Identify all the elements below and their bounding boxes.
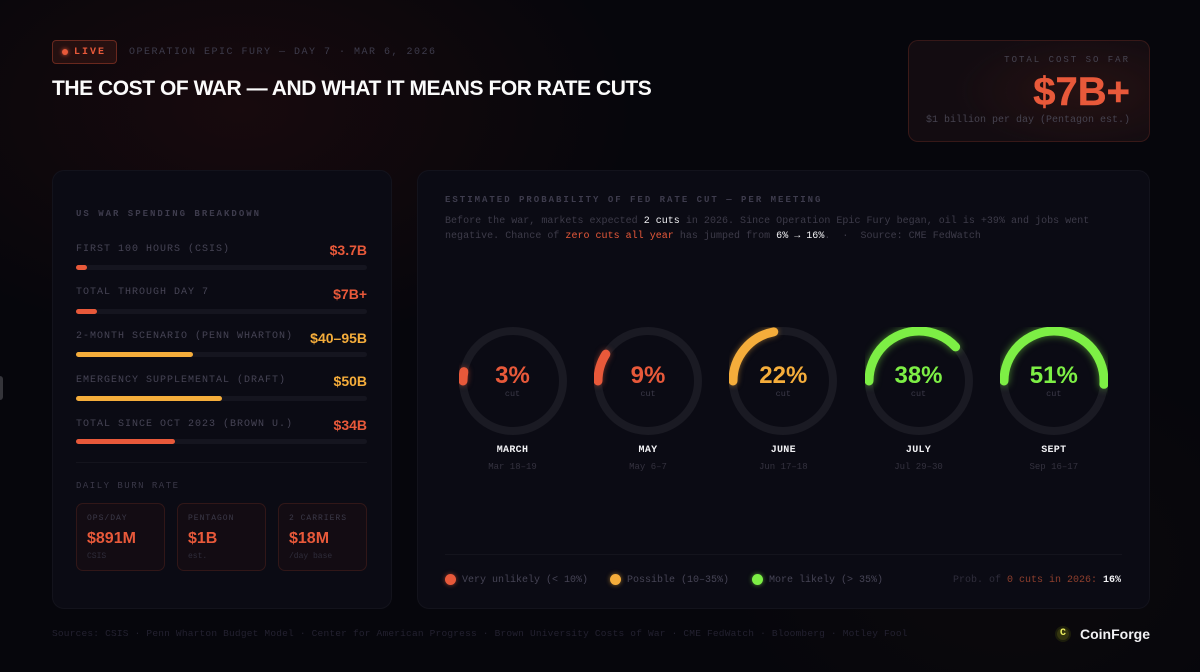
- spending heading: US WAR SPENDING BREAKDOWN: [76, 209, 261, 219]
- cost value: $7B+: [1033, 70, 1130, 114]
- gauge: march: 3%: [495, 362, 530, 389]
- gauge: sept: Sep 16–17: [1029, 462, 1078, 472]
- probability heading: ESTIMATED PROBABILITY OF FED RATE CUT — PER MEETING: [445, 195, 822, 205]
- burn rate heading: DAILY BURN RATE: [76, 481, 180, 491]
- title: THE COST OF WAR — AND WHAT IT MEANS FOR RATE CUTS: [52, 77, 651, 100]
- gauge: june: [729, 327, 837, 472]
- text: Possible (10–35%): [627, 575, 729, 586]
- text: Very unlikely (< 10%): [462, 575, 588, 586]
- card: ops per day: $891M: [87, 530, 136, 547]
- brand name: CoinForge: [1080, 626, 1150, 642]
- logo: coinforge: [1055, 626, 1150, 642]
- card: pentagon: PENTAGON: [188, 514, 234, 523]
- text: $7B+: [333, 286, 367, 302]
- spending row 2: [76, 286, 367, 314]
- gauge: july: JULY: [906, 445, 931, 456]
- gauge: june: cut: [776, 389, 791, 399]
- total cost box: [908, 40, 1150, 142]
- probability description: [445, 216, 1089, 242]
- operation label: OPERATION EPIC FURY — DAY 7 · MAR 6, 2026: [129, 47, 437, 58]
- gauge: march: MARCH: [497, 445, 528, 456]
- gauge: july: [865, 327, 973, 472]
- card: pentagon: est.: [188, 552, 207, 561]
- cost note: $1 billion per day (Pentagon est.): [926, 115, 1130, 126]
- gauge: march: Mar 18–19: [488, 462, 537, 472]
- gauge: sept: 51%: [1030, 362, 1078, 389]
- probability description: Before the war, markets expected 2 cuts in 2026. Since Operation Epic Fury began, oil is +39% and jobs went: [445, 216, 1089, 227]
- probability description: negative. Chance of zero cuts all year has jumped from 6% → 16%. · Source: CME FedWatch: [445, 231, 981, 242]
- sources footer: Sources: CSIS · Penn Wharton Budget Model · Center for American Progress · Brown University Costs of War · CME FedWatch · Bloomberg · Motley Fool: [52, 628, 908, 639]
- spending row 5: [76, 417, 367, 444]
- gauge: may: cut: [640, 389, 656, 399]
- zero cuts stat: Prob. of 0 cuts in 2026: 16%: [953, 575, 1121, 586]
- gauge: sept: cut: [1046, 389, 1061, 399]
- legend: more likely: [749, 571, 883, 588]
- legend: possible: [607, 571, 729, 588]
- gauge: may: 9%: [631, 362, 665, 389]
- live badge: LIVE: [74, 47, 106, 58]
- card: pentagon: $1B: [188, 530, 217, 547]
- gauge: june: Jun 17–18: [759, 462, 808, 472]
- gauge: sept: [1000, 327, 1108, 472]
- icon: coin: [1055, 626, 1071, 642]
- text: TOTAL SINCE OCT 2023 (BROWN U.): [76, 419, 293, 430]
- text: FIRST 100 HOURS (CSIS): [76, 244, 230, 255]
- card: pentagon: [177, 503, 266, 571]
- gauge: may: [594, 327, 702, 472]
- text: $3.7B: [330, 242, 367, 258]
- gauge: may: May 6–7: [629, 462, 667, 472]
- gauge: march: [459, 327, 567, 472]
- gauge: july: Jul 29–30: [894, 462, 943, 472]
- text: 2-MONTH SCENARIO (PENN WHARTON): [76, 331, 293, 342]
- legend: very unlikely: [442, 571, 588, 588]
- text: TOTAL THROUGH DAY 7: [76, 287, 209, 298]
- card: carriers: [278, 503, 367, 571]
- text: EMERGENCY SUPPLEMENTAL (DRAFT): [76, 375, 286, 386]
- text: $50B: [334, 373, 367, 389]
- spending row 3: [76, 330, 367, 357]
- gauge: june: JUNE: [771, 445, 796, 456]
- card: carriers: $18M: [289, 530, 329, 547]
- panel: spending breakdown: [52, 170, 392, 609]
- text: More likely (> 35%): [769, 575, 883, 586]
- left edge tab: [0, 376, 3, 400]
- card: carriers: /day base: [289, 552, 332, 561]
- gauge: july: 38%: [894, 362, 943, 389]
- card: ops per day: [76, 503, 165, 571]
- gauge: june: 22%: [759, 362, 807, 389]
- cost label: TOTAL COST SO FAR: [1004, 55, 1130, 65]
- text: $34B: [334, 417, 367, 433]
- gauge: march: cut: [505, 389, 520, 399]
- icon: coin: C: [1060, 628, 1066, 639]
- live badge: [52, 40, 117, 64]
- card: ops per day: OPS/DAY: [87, 514, 128, 523]
- panel: rate cut probability: [417, 170, 1150, 609]
- card: carriers: 2 CARRIERS: [289, 514, 347, 523]
- text: $40–95B: [310, 330, 367, 346]
- spending row 1: [76, 242, 367, 270]
- gauge: july: cut: [911, 389, 926, 399]
- gauge: may: MAY: [639, 445, 657, 456]
- gauge: sept: SEPT: [1041, 445, 1066, 456]
- card: ops per day: CSIS: [87, 552, 106, 561]
- spending row 4: [76, 373, 367, 401]
